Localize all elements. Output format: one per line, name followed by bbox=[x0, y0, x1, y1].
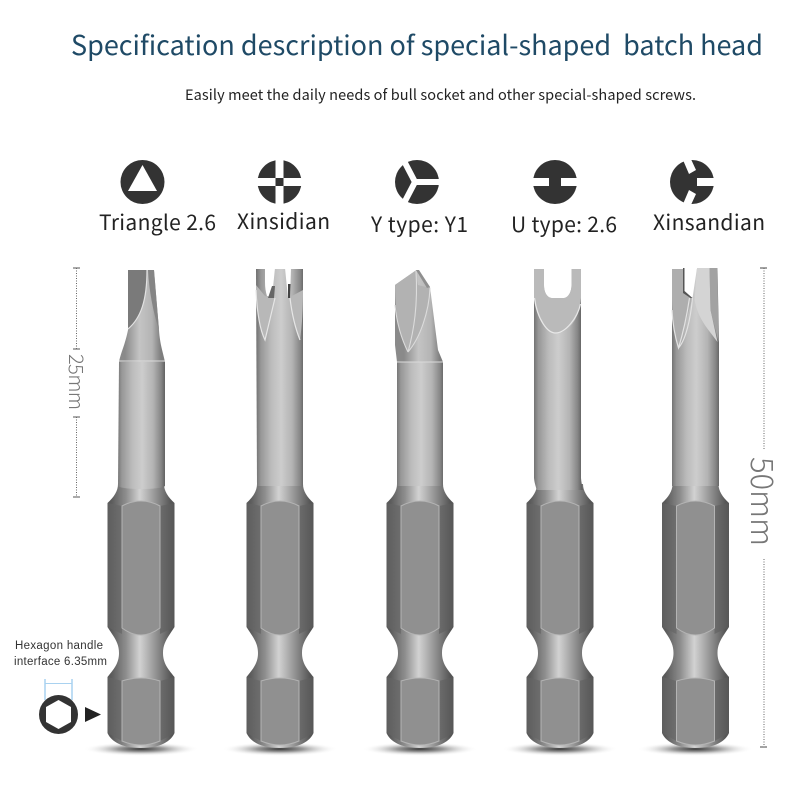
subtitle: Easily meet the daily needs of bull socket and other special-shaped screws. bbox=[185, 84, 696, 105]
label: Y type: Y1: Y type: Y1 bbox=[370, 209, 468, 239]
callout: hexagon handle: Hexagon handle bbox=[15, 640, 103, 652]
label: Triangle 2.6: Triangle 2.6 bbox=[99, 207, 216, 237]
dimension: 50mm: 50mm bbox=[742, 457, 787, 546]
label: Xinsidian: Xinsidian bbox=[237, 206, 330, 236]
icon: triangle bbox=[120, 160, 164, 204]
dimension: 25mm: 25mm bbox=[63, 354, 92, 410]
icon: U type bbox=[532, 160, 578, 204]
bit: U type bbox=[502, 269, 618, 756]
dimension: 25mm bbox=[63, 268, 92, 497]
icon: Y type bbox=[395, 159, 441, 205]
label: U type: 2.6: U type: 2.6 bbox=[511, 209, 617, 239]
dimension: 50mm bbox=[742, 268, 787, 747]
callout: hexagon handle: interface 6.35mm bbox=[14, 656, 107, 668]
bit: Triangle 2.6 bbox=[83, 270, 199, 756]
icon: Xinsandian bbox=[670, 157, 716, 207]
callout: hexagon handle bbox=[14, 640, 107, 734]
label: Xinsandian: Xinsandian bbox=[653, 207, 765, 237]
title: Specification description of special-shaped batch head bbox=[71, 24, 763, 63]
bit: Xinsidian bbox=[222, 268, 338, 756]
bit: Y type bbox=[362, 270, 478, 756]
bit: Xinsandian bbox=[638, 268, 754, 756]
icon: Xinsidian bbox=[257, 159, 302, 205]
